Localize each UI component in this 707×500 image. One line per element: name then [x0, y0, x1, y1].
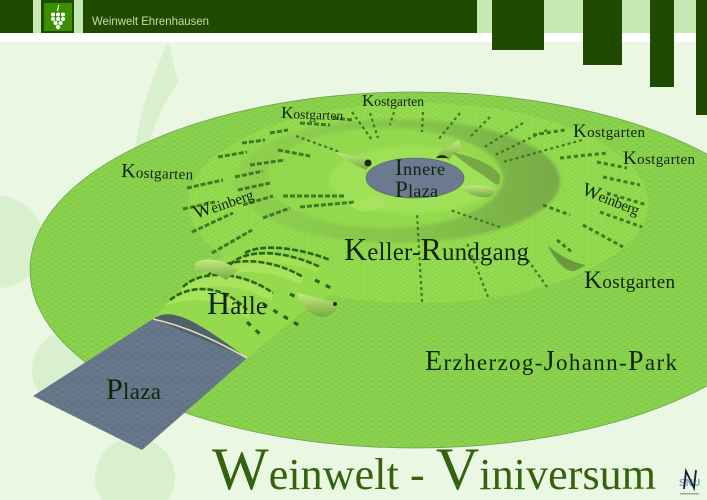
inner terrace: [267, 128, 503, 228]
decorative background leaf and circles: [0, 42, 178, 500]
main plaza slab: [33, 319, 247, 450]
label: Halle: Halle: [207, 285, 267, 321]
label: Kostgarten top: Kostgarten: [362, 91, 424, 110]
label: Innere Plaza: Innere: [395, 155, 445, 180]
label: Innere Plaza: Plaza: [395, 177, 438, 202]
label: Kostgarten top right: Kostgarten: [573, 121, 646, 142]
label: Kostgarten far left: Kostgarten: [121, 160, 194, 185]
vineyard mound: [188, 103, 648, 303]
park lawn disc: [30, 92, 707, 448]
label: Keller-Rundgang: Keller-Rundgang: [344, 231, 530, 267]
label: Weinberg right: Weinberg: [579, 179, 643, 220]
icon: grape logo: [44, 3, 72, 31]
vine rows radial: [183, 112, 647, 302]
tunnels and cellar entrances: [195, 140, 586, 317]
vine rows on hall: [170, 248, 335, 336]
label: Kostgarten lower right: Kostgarten: [584, 267, 676, 294]
header band: [0, 0, 707, 115]
label: Weinberg left: Weinberg: [191, 184, 257, 224]
icon: architect logo: SNU: [679, 478, 700, 489]
label: Erzherzog-Johann-Park: Erzherzog-Johann-Park: [425, 346, 678, 377]
hall ramp: [153, 244, 352, 358]
label: Kostgarten right: Kostgarten: [623, 148, 696, 169]
inner plaza disc: [366, 158, 464, 198]
header title: Weinwelt Ehrenhausen: [92, 14, 209, 28]
label: Plaza: Plaza: [106, 373, 161, 406]
icon: architect logo: [679, 470, 700, 494]
hall entrance arch: [153, 314, 247, 358]
cellar ring trench: [234, 119, 560, 243]
label: Kostgarten top left: Kostgarten: [281, 103, 344, 124]
label: Innere Plaza: [395, 155, 445, 202]
